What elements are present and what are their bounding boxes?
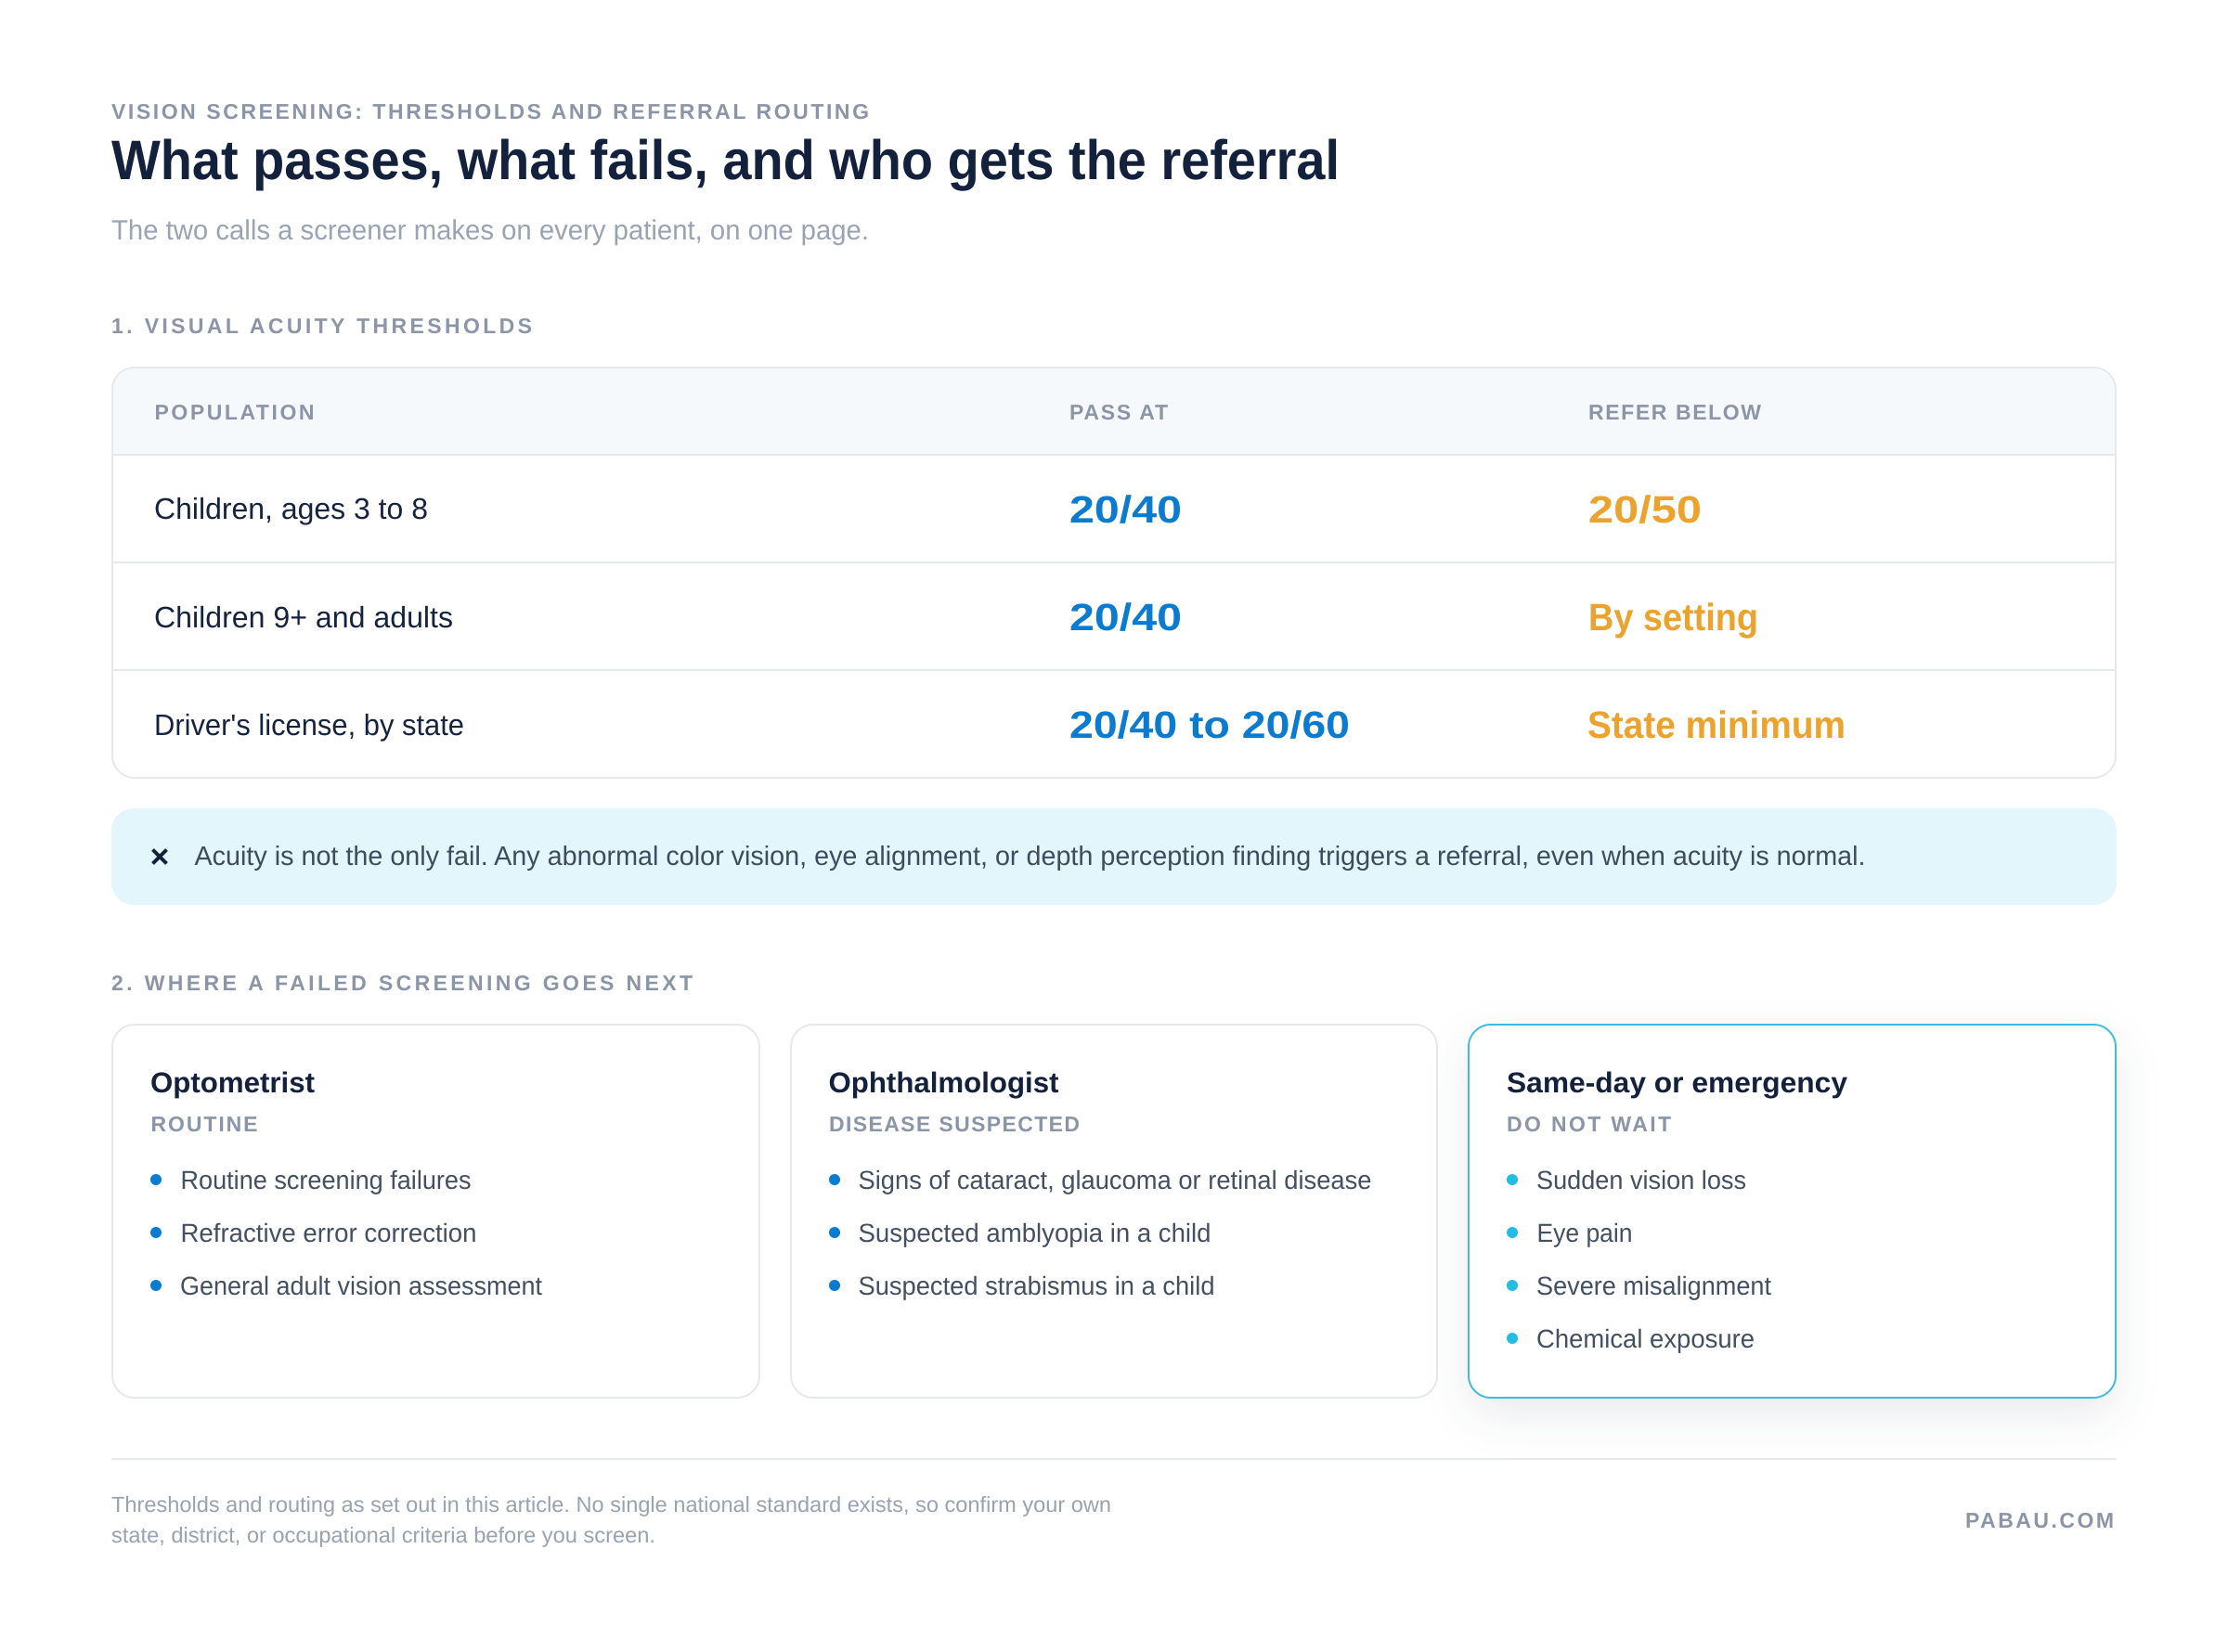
row: children 3 to 8: 20/40 xyxy=(1069,488,1182,531)
footnote: Thresholds and routing as set out in this article. No single national standard exists, so confirm your own xyxy=(111,1492,1111,1516)
bullet list: General adult vision assessment xyxy=(180,1271,542,1300)
bullet list xyxy=(829,1166,1372,1300)
row: children 3 to 8: Children, ages 3 to 8 xyxy=(154,492,428,525)
eyebrow: VISION SCREENING: THRESHOLDS AND REFERRAL ROUTING xyxy=(111,99,869,123)
card title: Same-day or emergency xyxy=(1507,1066,1848,1099)
bullet list: Suspected amblyopia in a child xyxy=(858,1219,1211,1247)
card title: Optometrist xyxy=(150,1066,315,1099)
card subtitle: DO NOT WAIT xyxy=(1507,1112,1671,1136)
callout text: Acuity is not the only fail. Any abnormal color vision, eye alignment, or depth perception finding triggers a referral, even when acuity is normal. xyxy=(195,842,1866,871)
card subtitle: ROUTINE xyxy=(150,1112,258,1136)
table frame xyxy=(112,368,2116,778)
bullet list xyxy=(1507,1166,1771,1353)
panel: same-day or emergency xyxy=(1469,1025,2116,1398)
bullet list: Chemical exposure xyxy=(1536,1324,1755,1353)
footnote xyxy=(111,1492,1111,1547)
row: driver's license: Driver's license, by state xyxy=(154,708,464,742)
row: children 9+ and adults xyxy=(154,596,1758,639)
icon: cross xyxy=(152,850,167,863)
card subtitle: DISEASE SUSPECTED xyxy=(829,1112,1080,1136)
bullet list: Sudden vision loss xyxy=(1536,1166,1746,1194)
bullet list: Severe misalignment xyxy=(1536,1271,1771,1300)
row: children 9+ and adults: 20/40 xyxy=(1069,596,1182,639)
row: children 3 to 8: 20/50 xyxy=(1588,488,1702,531)
panel: optometrist xyxy=(112,1025,759,1398)
bullet list: Refractive error correction xyxy=(180,1219,477,1247)
column header: refer below: REFER BELOW xyxy=(1588,400,1761,424)
panel: thresholds table xyxy=(112,368,2116,778)
section heading: where a failed screening goes next: 2. WHERE A FAILED SCREENING GOES NEXT xyxy=(111,971,693,995)
bullet list: Signs of cataract, glaucoma or retinal disease xyxy=(858,1166,1372,1194)
callout: acuity is not the only fail xyxy=(111,808,2117,905)
bullet list: Eye pain xyxy=(1537,1219,1632,1247)
row: driver's license: State minimum xyxy=(1587,703,1846,746)
row: driver's license: 20/40 to 20/60 xyxy=(1069,703,1350,746)
section heading: visual acuity thresholds: 1. VISUAL ACUITY THRESHOLDS xyxy=(111,314,532,338)
row: children 9+ and adults: By setting xyxy=(1588,596,1758,639)
column header: population: POPULATION xyxy=(154,400,314,424)
table header row xyxy=(113,368,2115,454)
header block xyxy=(111,99,1340,246)
row: driver's license xyxy=(154,703,1846,746)
brand mark: PABAU.COM xyxy=(1965,1508,2114,1532)
bullet list: Routine screening failures xyxy=(180,1166,472,1194)
subtitle: The two calls a screener makes on every patient, on one page. xyxy=(111,215,869,246)
panel: ophthalmologist xyxy=(791,1025,1437,1398)
bullet list: Suspected strabismus in a child xyxy=(858,1271,1214,1300)
row: children 3 to 8 xyxy=(154,488,1702,531)
row: children 9+ and adults: Children 9+ and adults xyxy=(154,600,453,634)
bullet list xyxy=(150,1166,542,1300)
column header: pass at: PASS AT xyxy=(1069,400,1168,424)
title: What passes, what fails, and who gets the referral xyxy=(111,129,1340,191)
footnote: state, district, or occupational criteria before you screen. xyxy=(111,1523,655,1547)
card title: Ophthalmologist xyxy=(828,1066,1058,1099)
